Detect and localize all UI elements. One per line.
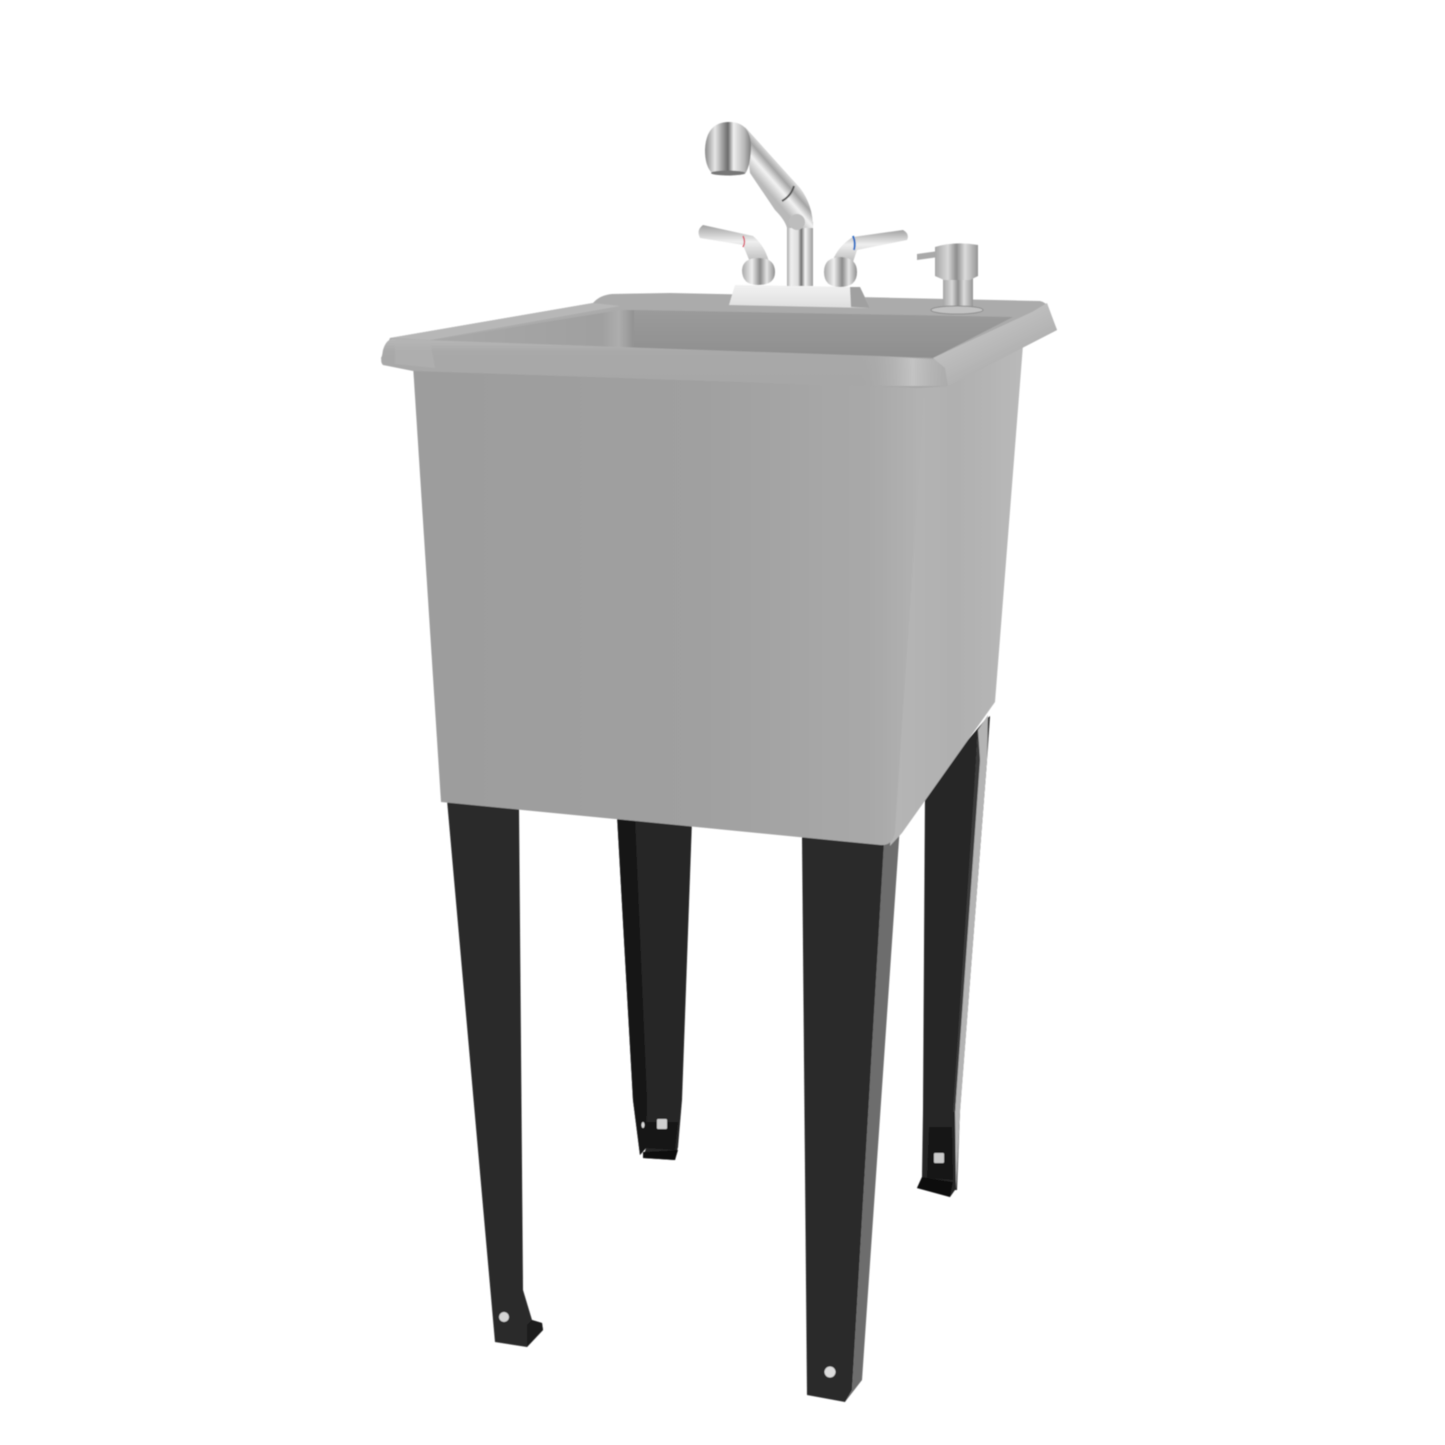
dispenser: pump lever [917, 249, 953, 260]
rim: left corner highlight [395, 340, 435, 368]
tub: right face [890, 345, 1023, 846]
dispenser: pump head [935, 243, 978, 280]
dispenser: base ring [931, 306, 983, 314]
faucet: left handle [699, 225, 775, 285]
faucet [699, 122, 908, 308]
faucet: tube collar [782, 186, 794, 201]
basin: back wall [634, 310, 1013, 358]
faucet: right handle [824, 230, 908, 287]
dispenser: neck [943, 278, 973, 308]
rim: back shelf and outer edge [381, 293, 1057, 388]
faucet: spray head [705, 122, 751, 176]
rim: front right corner highlight [860, 355, 948, 386]
rim: front lip [381, 339, 948, 388]
legs [447, 715, 990, 1402]
rim: left edge highlight [390, 303, 620, 340]
faucet: knob [789, 214, 805, 230]
basin: left inner wall [420, 310, 634, 351]
rim: right lip [933, 303, 1057, 386]
tub: front face [413, 365, 925, 845]
leg: front left [447, 800, 543, 1347]
faucet: base plate right edge [850, 287, 870, 308]
soap dispenser [917, 243, 983, 314]
faucet: head nozzle [711, 170, 745, 176]
tub rim and basin [381, 293, 1057, 388]
faucet: spout tube [745, 127, 813, 228]
faucet: base plate [729, 285, 870, 308]
leg: back right [917, 715, 990, 1197]
leg: back left [617, 815, 692, 1160]
tub body [413, 345, 1023, 846]
faucet: spout post [787, 222, 813, 286]
leg: front right [802, 825, 900, 1402]
